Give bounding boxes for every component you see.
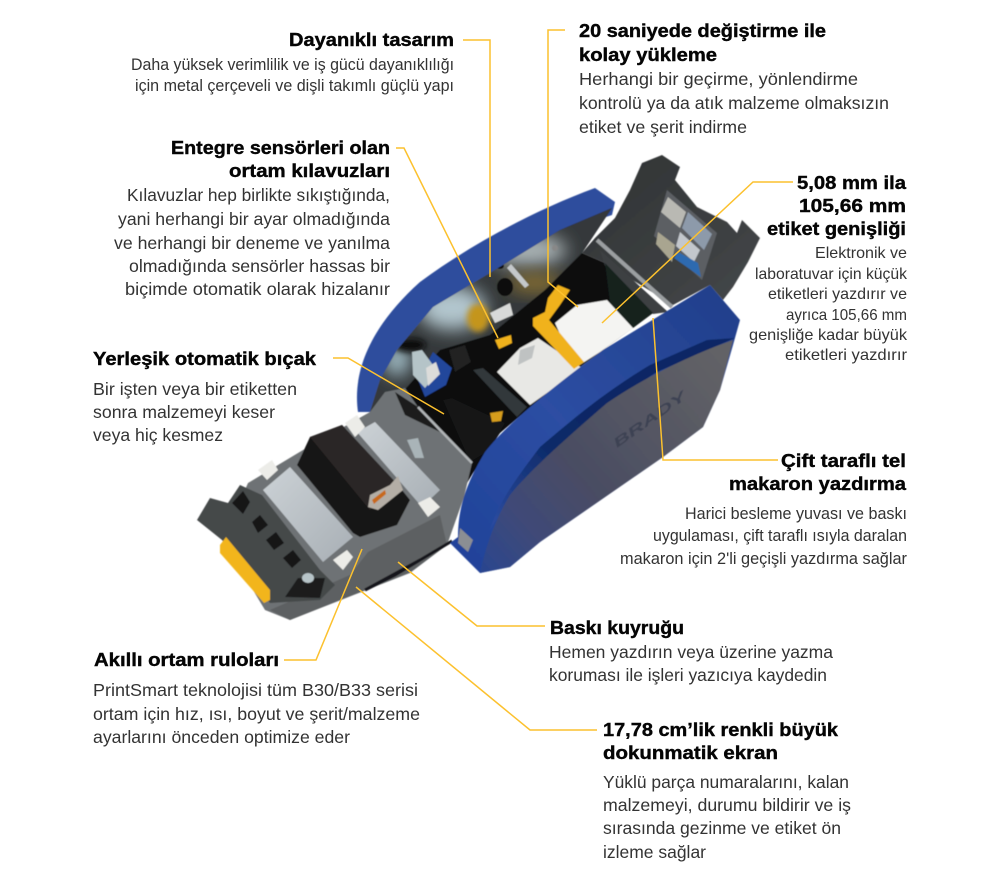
callout: Yerleşik otomatik bıçak: Bir işten veya bir etiketten xyxy=(93,379,297,399)
callout: etiket genişliği xyxy=(749,172,908,364)
rear blue shell xyxy=(357,188,615,412)
callout: 20 saniyede değiştirme: kontrolü ya da atık malzeme olmaksızın xyxy=(579,93,889,113)
ribbon roll right xyxy=(357,422,440,507)
interior metal wall xyxy=(371,208,612,410)
callout: Entegre sensörleri olan ortam kılavuzları: Entegre sensörleri olan xyxy=(171,137,390,158)
callout: Entegre sensörleri olan ortam kılavuzları: ve herhangi bir deneme ve yanılma xyxy=(114,233,390,253)
callout: Akıllı ortam ruloları: ortam için hız, ısı, boyut ve şerit/malzeme xyxy=(93,704,420,724)
callout: etiket genişliği: etiketleri yazdırır ve xyxy=(768,286,907,303)
black cartridge xyxy=(297,425,410,537)
callout: Akıllı ortam ruloları: Akıllı ortam ruloları xyxy=(94,649,279,670)
navy stripe xyxy=(490,338,735,530)
callout: Dayanıklı tasarım: Dayanıklı tasarım xyxy=(289,29,454,50)
callout: Çift taraflı tel makaron yazdırma xyxy=(620,450,907,568)
instruction sticker xyxy=(654,190,717,280)
callout: etiket genişliği: ayrıca 105,66 mm xyxy=(786,307,907,324)
callout: etiket genişliği: 105,66 mm xyxy=(799,195,906,216)
callout: Baskı kuyruğu xyxy=(549,617,833,685)
callout: Baskı kuyruğu: koruması ile işleri yazıcıya kaydedin xyxy=(549,665,827,685)
callout: Akıllı ortam ruloları: PrintSmart teknolojisi tüm B30/B33 serisi xyxy=(93,680,418,700)
callout: Çift taraflı tel makaron yazdırma: Harici besleme yuvası ve baskı xyxy=(685,504,907,523)
callout: Akıllı ortam ruloları: ayarlarını önceden optimize eder xyxy=(93,727,350,747)
callout: Yerleşik otomatik bıçak: Yerleşik otomatik bıçak xyxy=(93,348,317,369)
open rear flap xyxy=(582,155,760,328)
callout: etiket genişliği: genişliğe kadar büyük xyxy=(749,327,908,344)
callout: etiket genişliği: Elektronik ve xyxy=(815,245,907,262)
callout: Çift taraflı tel makaron yazdırma: Çift taraflı tel xyxy=(781,450,906,471)
callout: 20 saniyede değiştirme xyxy=(579,20,889,137)
callout: dokunmatik ekran xyxy=(603,719,851,862)
callout: Dayanıklı tasarım: Daha yüksek verimlilik ve iş gücü dayanıklılığı xyxy=(131,55,454,74)
callout: etiket genişliği: laboratuvar için küçük xyxy=(755,266,908,283)
callout: 20 saniyede değiştirme: Herhangi bir geçirme, yönlendirme xyxy=(579,69,858,89)
callout: Çift taraflı tel makaron yazdırma: uygulaması, çift taraflı ısıyla daralan xyxy=(653,526,907,545)
callout: dokunmatik ekran: dokunmatik ekran xyxy=(603,742,778,763)
black under-tray edge xyxy=(365,541,452,590)
callout: etiket genişliği: etiket genişliği xyxy=(767,218,906,239)
callout: 20 saniyede değiştirme: etiket ve şerit indirme xyxy=(579,117,747,137)
callout leader lines xyxy=(284,30,793,730)
callout: Entegre sensörleri olan ortam kılavuzları: Kılavuzlar hep birlikte sıkıştığında, xyxy=(127,185,390,205)
callout: Akıllı ortam ruloları xyxy=(93,649,420,747)
callout: Baskı kuyruğu: Hemen yazdırın veya üzerine yazma xyxy=(549,642,833,662)
printer interior xyxy=(370,208,653,495)
callout: Çift taraflı tel makaron yazdırma: makaron yazdırma xyxy=(729,473,907,494)
callout: 20 saniyede değiştirme: 20 saniyede değiştirme ile xyxy=(579,20,826,41)
callout: Dayanıklı tasarım: için metal çerçeveli ve dişli takımlı güçlü yapı xyxy=(135,76,454,95)
print head mechanism xyxy=(443,368,527,462)
label rolls and yellow guide xyxy=(495,285,633,405)
callout: Yerleşik otomatik bıçak: sonra malzemeyi keser xyxy=(93,402,275,422)
callout: Baskı kuyruğu: Baskı kuyruğu xyxy=(550,617,684,638)
printer illustration xyxy=(197,155,760,620)
callout: Çift taraflı tel makaron yazdırma: makaron için 2'li geçişli yazdırma sağlar xyxy=(620,549,907,568)
front blue shell xyxy=(450,285,740,573)
callout: Dayanıklı tasarım xyxy=(131,29,454,95)
callout: dokunmatik ekran: izleme sağlar xyxy=(603,842,706,862)
BRADY logo: BRADY xyxy=(610,387,691,450)
callout: Entegre sensörleri olan ortam kılavuzları: yani herhangi bir ayar olmadığında xyxy=(118,209,390,229)
callout: Entegre sensörleri olan ortam kılavuzları: olmadığında sensörler hassas bir xyxy=(129,256,390,276)
callout: Yerleşik otomatik bıçak: veya hiç kesmez xyxy=(93,425,223,445)
lower drawer tray xyxy=(197,388,472,620)
callout: etiket genişliği: etiketleri yazdırır xyxy=(785,347,908,364)
callout: dokunmatik ekran: Yüklü parça numaralarını, kalan xyxy=(603,772,849,792)
callout: dokunmatik ekran: 17,78 cm’lik renkli büyük xyxy=(603,719,839,740)
callout: dokunmatik ekran: malzemeyi, durumu bildirir ve iş xyxy=(603,795,851,815)
callout: dokunmatik ekran: sırasında gezinme ve etiket ön xyxy=(603,818,841,838)
callout: Entegre sensörleri olan ortam kılavuzları: biçimde otomatik olarak hizalanır xyxy=(125,279,390,299)
wall bracket and blue block xyxy=(412,345,471,397)
shell side face xyxy=(480,340,733,573)
callout: Entegre sensörleri olan ortam kılavuzları xyxy=(114,137,390,299)
ribbon roll left xyxy=(263,467,353,562)
callout: Yerleşik otomatik bıçak xyxy=(93,348,317,445)
handle frame xyxy=(197,485,335,603)
callout: etiket genişliği: 5,08 mm ila xyxy=(797,172,907,193)
callout: 20 saniyede değiştirme: kolay yükleme xyxy=(579,44,717,65)
callout: Entegre sensörleri olan ortam kılavuzları: ortam kılavuzları xyxy=(229,160,390,181)
yellow handle xyxy=(220,537,270,603)
